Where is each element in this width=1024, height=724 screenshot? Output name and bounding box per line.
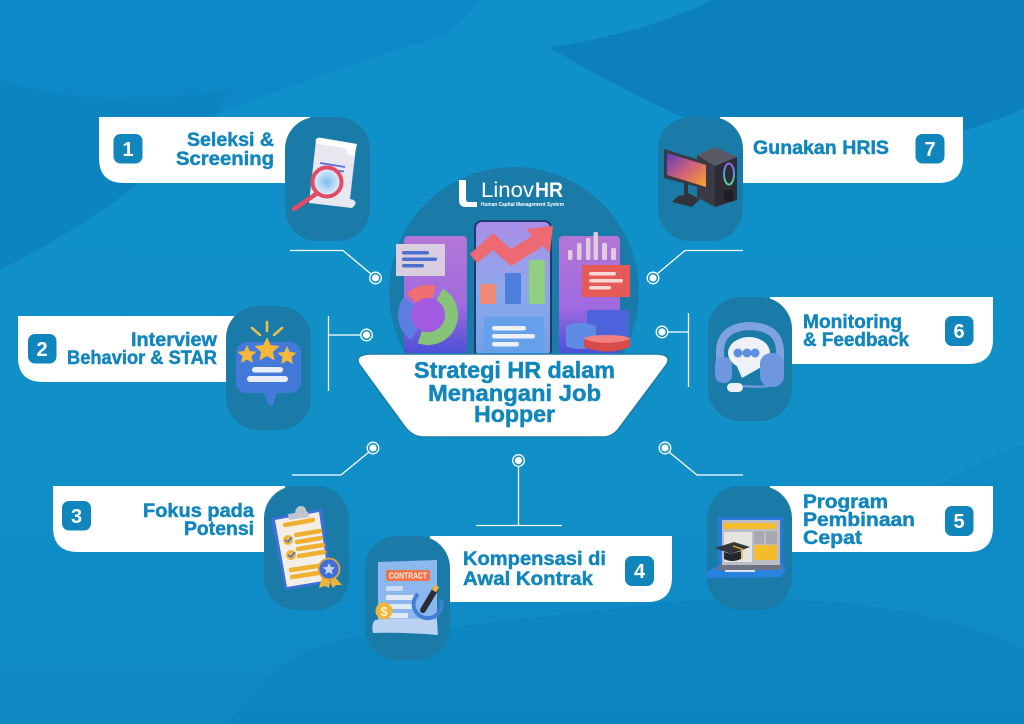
- item 4: Kompensasi di Awal Kontrak: [365, 536, 672, 660]
- item 4: Kompensasi di Awal Kontrak: Kompensasi di: [463, 549, 606, 570]
- item 1: Seleksi & Screening: 1: [122, 139, 134, 161]
- logo: Human Capital Management System: [481, 202, 564, 208]
- item 4: Kompensasi di Awal Kontrak: 4: [634, 561, 646, 583]
- connector 7: [647, 250, 743, 284]
- connector 4: [476, 455, 562, 526]
- item 3: Fokus pada Potensi: Potensi: [184, 519, 254, 540]
- item 1: Seleksi & Screening: Screening: [176, 149, 274, 170]
- icon: rating bubble: [236, 322, 301, 406]
- item 5: Program Pembinaan Cepat: Program: [803, 492, 888, 513]
- item 5: Program Pembinaan Cepat: 5: [953, 511, 965, 533]
- item 3: Fokus pada Potensi: Fokus pada: [143, 501, 254, 522]
- item 6: Monitoring & Feedback: Monitoring: [803, 312, 902, 333]
- connector 3: [292, 442, 379, 475]
- growth arrow: [470, 226, 553, 266]
- logo: Linov: [481, 179, 535, 202]
- item 1: Seleksi & Screening: [99, 117, 370, 241]
- item 6: Monitoring & Feedback: 6: [953, 321, 965, 343]
- logo: [459, 179, 564, 208]
- item 7: Gunakan HRIS: Gunakan HRIS: [753, 138, 889, 159]
- item 2: Interview Behavior & STAR: Interview: [131, 330, 217, 351]
- left chart panel: [395, 236, 467, 354]
- item 7: Gunakan HRIS: 7: [924, 139, 936, 161]
- item 2: Interview Behavior & STAR: [18, 306, 311, 430]
- icon: headset with chat bubble: [715, 326, 784, 392]
- central hero illustration: [389, 167, 639, 354]
- connector 6: [656, 313, 688, 387]
- title panel: [358, 354, 668, 437]
- item 3: Fokus pada Potensi: [53, 486, 349, 610]
- title: Strategi HR dalam: [414, 357, 615, 383]
- item 5: Program Pembinaan Cepat: Pembinaan: [803, 510, 915, 531]
- connector 1: [290, 250, 381, 284]
- title: Menangani Job: [428, 380, 601, 406]
- phone with bar chart: [470, 221, 553, 357]
- connector 2: [328, 316, 372, 391]
- icon: laptop with graduation cap: [706, 517, 786, 578]
- icon: contract: CONTRACT: [389, 572, 427, 580]
- item 1: Seleksi & Screening: Seleksi &: [187, 130, 274, 151]
- connector 5: [659, 442, 743, 475]
- item 2: Interview Behavior & STAR: Behavior & STAR: [67, 348, 217, 369]
- item 3: Fokus pada Potensi: 3: [71, 506, 82, 528]
- icon: document with magnifier: [294, 138, 357, 209]
- title: Hopper: [474, 401, 555, 427]
- icon: desktop computer: [664, 147, 737, 207]
- item 5: Program Pembinaan Cepat: Cepat: [803, 528, 863, 549]
- item 6: Monitoring & Feedback: & Feedback: [803, 330, 909, 351]
- item 4: Kompensasi di Awal Kontrak: Awal Kontrak: [463, 569, 593, 590]
- icon: contract: [372, 560, 442, 635]
- item 6: Monitoring & Feedback: [708, 297, 993, 421]
- icon: clipboard with badge: [271, 506, 342, 590]
- item 7: Gunakan HRIS: [658, 117, 963, 241]
- item 5: Program Pembinaan Cepat: [706, 486, 993, 610]
- right chart panel: [559, 232, 630, 354]
- item 2: Interview Behavior & STAR: 2: [36, 339, 48, 361]
- logo: HR: [535, 179, 563, 202]
- title: [414, 357, 615, 427]
- icon: contract: $: [380, 604, 388, 619]
